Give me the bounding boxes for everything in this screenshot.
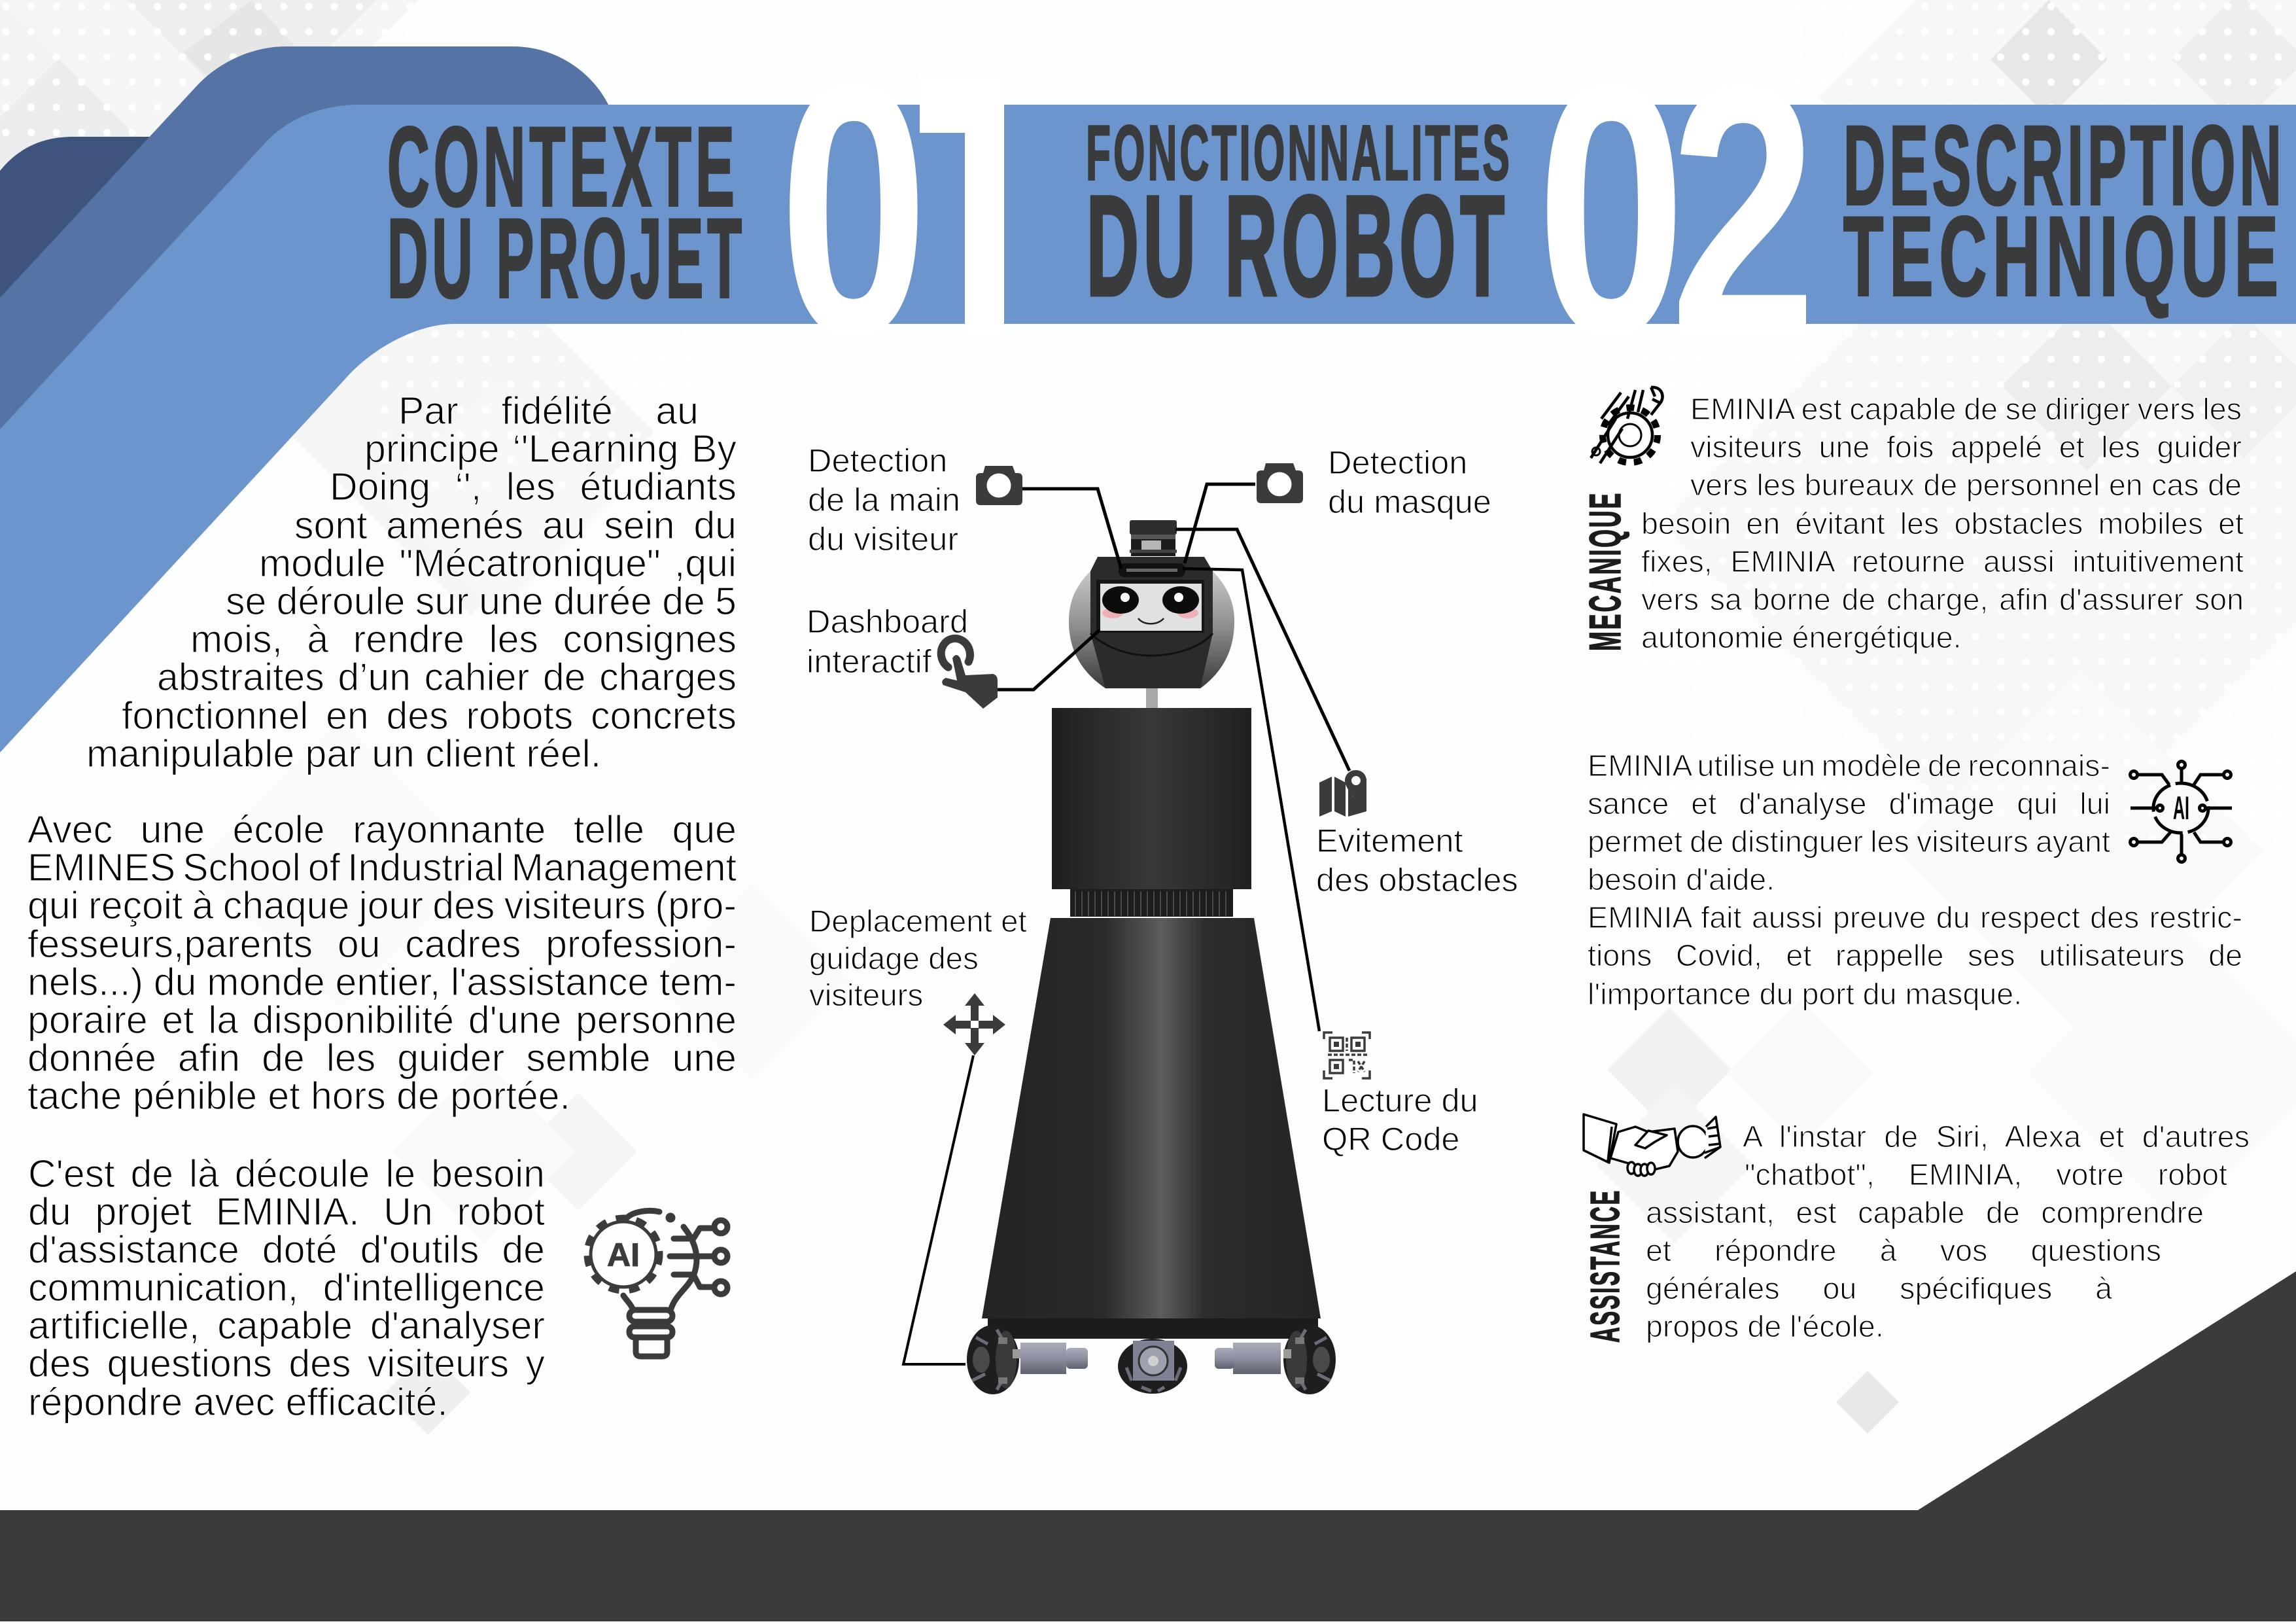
- label: lecture du QR code: QR Code: [1322, 1120, 1460, 1157]
- icon: AI lightbulb: [587, 1210, 727, 1356]
- text block: contexte paragraph 2: nels...) du monde entier, l'assistance tem-: [27, 961, 737, 1004]
- label: detection de la main: du visiteur: [808, 520, 958, 557]
- number 02: [1537, 9, 1817, 413]
- text block: contexte paragraph 1: [86, 389, 737, 775]
- text block: mecanique: vers sa borne de charge, afin d'assurer son: [1641, 582, 2244, 616]
- label: detection de la main: Detection: [808, 442, 947, 479]
- label: detection du masque: du masque: [1328, 483, 1491, 520]
- number 02: 0: [1537, 9, 1686, 412]
- text block: contexte paragraph 1: principe ‘'Learning By: [364, 427, 737, 470]
- text block: intelligence artificielle: [1588, 746, 2242, 1013]
- icon: gear and tools: [1591, 387, 1663, 463]
- text block: assistance: "chatbot", EMINIA, votre robot: [1745, 1157, 2227, 1192]
- robot: head: [1069, 557, 1234, 688]
- text block: contexte paragraph 2: tache pénible et hors de portée.: [27, 1074, 570, 1118]
- label: dashboard interactif: interactif: [807, 643, 931, 680]
- text block: contexte paragraph 1: fonctionnel en des robots concrets: [122, 694, 737, 737]
- icon: map with pin: [1319, 770, 1366, 817]
- text block: contexte paragraph 1: manipulable par un client réel.: [86, 732, 601, 775]
- text block: mecanique: [1641, 390, 2244, 657]
- label: deplacement et guidage: [809, 904, 1027, 1014]
- label: dashboard interactif: [807, 601, 968, 681]
- icon: AI lightbulb: AI: [607, 1237, 640, 1273]
- icon: camera right: [1257, 463, 1303, 503]
- heading: fonctionnalites du robot: [1086, 110, 1512, 325]
- text block: mecanique: autonomie énergétique.: [1641, 620, 1962, 654]
- label: detection du masque: [1328, 443, 1491, 521]
- robot illustration: [967, 520, 1336, 1394]
- text block: contexte paragraph 3: [28, 1152, 545, 1424]
- heading: fonctionnalites du robot: FONCTIONNALITES: [1086, 110, 1512, 196]
- label: lecture du QR code: Lecture du: [1322, 1082, 1478, 1119]
- text block: intelligence artificielle: EMINIA utilise un modèle de reconnais-: [1588, 749, 2110, 783]
- robot: upper cylinder: [1052, 708, 1251, 889]
- bottom dark band: [0, 1510, 2296, 1621]
- label: lecture du QR code: [1322, 1081, 1478, 1158]
- text block: intelligence artificielle: permet de distinguer les visiteurs ayant: [1588, 824, 2110, 858]
- text block: intelligence artificielle: tions Covid, et rappelle ses utilisateurs de: [1588, 938, 2242, 972]
- ribbon: navy back layer: [0, 137, 157, 308]
- text block: contexte paragraph 3: répondre avec efficacité.: [28, 1381, 448, 1424]
- robot: base plate: [988, 1318, 1318, 1339]
- text block: contexte paragraph 1: Doing ‘', les étudiants: [330, 465, 737, 508]
- text block: intelligence artificielle: besoin d'aide.: [1588, 862, 1775, 896]
- text block: contexte paragraph 3: artificielle, capable d'analyser: [28, 1304, 545, 1347]
- text block: contexte paragraph 2: Avec une école rayonnante telle que: [27, 808, 737, 851]
- ribbon: mid blue layer: [0, 46, 608, 523]
- text block: contexte paragraph 2: EMINES School of Industrial Management: [27, 846, 737, 889]
- label: deplacement et guidage: visiteurs: [809, 978, 923, 1013]
- icon: handshake: [1584, 1114, 1720, 1176]
- leader lines: [903, 484, 1349, 1364]
- text block: contexte paragraph 3: des questions des visiteurs y: [28, 1342, 545, 1385]
- heading: contexte du projet: [387, 104, 746, 321]
- label: evitement des obstacles: Evitement: [1316, 822, 1463, 859]
- robot: motors: [1020, 1343, 1281, 1374]
- text block: contexte paragraph 1: sont amenés au sein du: [294, 504, 737, 547]
- text block: mecanique: visiteurs une fois appelé et les guider: [1690, 430, 2242, 464]
- number 01: [790, 105, 965, 324]
- banner: sections 02 and 03: [1004, 105, 2296, 324]
- heading: description technique: [1843, 103, 2286, 319]
- label: evitement des obstacles: [1316, 821, 1518, 900]
- heading: contexte du projet: CONTEXTE: [387, 104, 739, 230]
- icon: camera left: [976, 466, 1022, 505]
- text block: intelligence artificielle: l'importance du port du masque.: [1588, 977, 2022, 1011]
- text block: mecanique: besoin en évitant les obstacles mobiles et: [1641, 506, 2244, 540]
- bottom-right dark triangle: [1918, 1271, 2296, 1510]
- robot: ribbed ring: [1070, 889, 1233, 917]
- text block: contexte paragraph 1: Par fidélité au: [398, 389, 699, 432]
- heading: contexte du projet: DU PROJET: [387, 196, 746, 321]
- text block: contexte paragraph 2: qui reçoit à chaque jour des visiteurs (pro-: [27, 884, 737, 927]
- text block: intelligence artificielle: EMINIA fait aussi preuve du respect des restric-: [1588, 900, 2242, 934]
- text block: assistance: A l'instar de Siri, Alexa et d'autres: [1743, 1119, 2250, 1153]
- label: detection du masque: Detection: [1328, 444, 1467, 481]
- text block: contexte paragraph 1: se déroule sur une durée de 5: [226, 580, 737, 623]
- text block: contexte paragraph 2: fesseurs,parents ou cadres profession-: [27, 923, 737, 966]
- text block: contexte paragraph 3: C'est de là découle le besoin: [28, 1152, 545, 1195]
- text block: assistance: assistant, est capable de comprendre: [1646, 1195, 2204, 1229]
- robot: neck: [1146, 688, 1158, 708]
- text block: contexte paragraph 1: abstraites d’un cahier de charges: [157, 656, 737, 699]
- label: deplacement et guidage: guidage des: [809, 941, 979, 976]
- icon: AI circuit: [2130, 762, 2232, 862]
- robot: conical body: [982, 918, 1321, 1318]
- text block: contexte paragraph 2: donnée afin de les guider semble une: [27, 1036, 737, 1080]
- text block: contexte paragraph 2: poraire et la disponibilité d'une personne: [27, 998, 737, 1042]
- icon: move arrows: [943, 993, 1005, 1055]
- robot: right wheel: [1283, 1325, 1336, 1394]
- text block: intelligence artificielle: sance et d'analyse d'image qui lui: [1588, 786, 2110, 821]
- text block: mecanique: EMINIA est capable de se diriger vers les: [1690, 392, 2242, 426]
- label: detection de la main: [808, 441, 960, 559]
- text block: assistance: générales ou spécifiques à: [1646, 1271, 2112, 1305]
- text block: contexte paragraph 1: mois, à rendre les consignes: [190, 618, 737, 661]
- label: MECANIQUE: MECANIQUE: [1580, 491, 1630, 651]
- heading: fonctionnalites du robot: DU ROBOT: [1087, 166, 1509, 325]
- robot: middle wheel: [1118, 1339, 1187, 1394]
- text block: contexte paragraph 3: communication, d'intelligence: [28, 1266, 545, 1309]
- label: deplacement et guidage: Deplacement et: [809, 904, 1027, 939]
- label: ASSISTANCE: ASSISTANCE: [1583, 1189, 1628, 1343]
- text block: assistance: et répondre à vos questions: [1646, 1233, 2161, 1267]
- text block: contexte paragraph 2: [27, 808, 737, 1118]
- robot: left wheel: [967, 1325, 1020, 1394]
- number 01: 0: [779, 9, 928, 412]
- text block: contexte paragraph 3: d'assistance doté d'outils de: [28, 1228, 545, 1271]
- text block: mecanique: fixes, EMINIA retourne aussi intuitivement: [1641, 544, 2244, 578]
- text block: contexte paragraph 3: du projet EMINIA. Un robot: [28, 1190, 545, 1233]
- text block: assistance: propos de l'école.: [1646, 1309, 1884, 1343]
- label: evitement des obstacles: des obstacles: [1316, 861, 1518, 898]
- icon: qr code: [1324, 1033, 1370, 1078]
- banner: section 01 contexte: [0, 105, 965, 752]
- number 01: 1: [883, 9, 1032, 412]
- robot: face: [1102, 586, 1199, 624]
- number 02: 2: [1670, 10, 1817, 413]
- icon: touch hand: [937, 635, 998, 709]
- label: dashboard interactif: Dashboard: [807, 603, 968, 640]
- text block: assistance: [1646, 1118, 2250, 1347]
- text block: mecanique: vers les bureaux de personnel en cas de: [1690, 468, 2242, 502]
- text block: contexte paragraph 1: module "Mécatronique" ,qui: [259, 542, 737, 585]
- robot: top sensor: [1130, 520, 1177, 556]
- label: detection de la main: de la main: [808, 481, 960, 518]
- icon: AI circuit: AI: [2173, 790, 2189, 826]
